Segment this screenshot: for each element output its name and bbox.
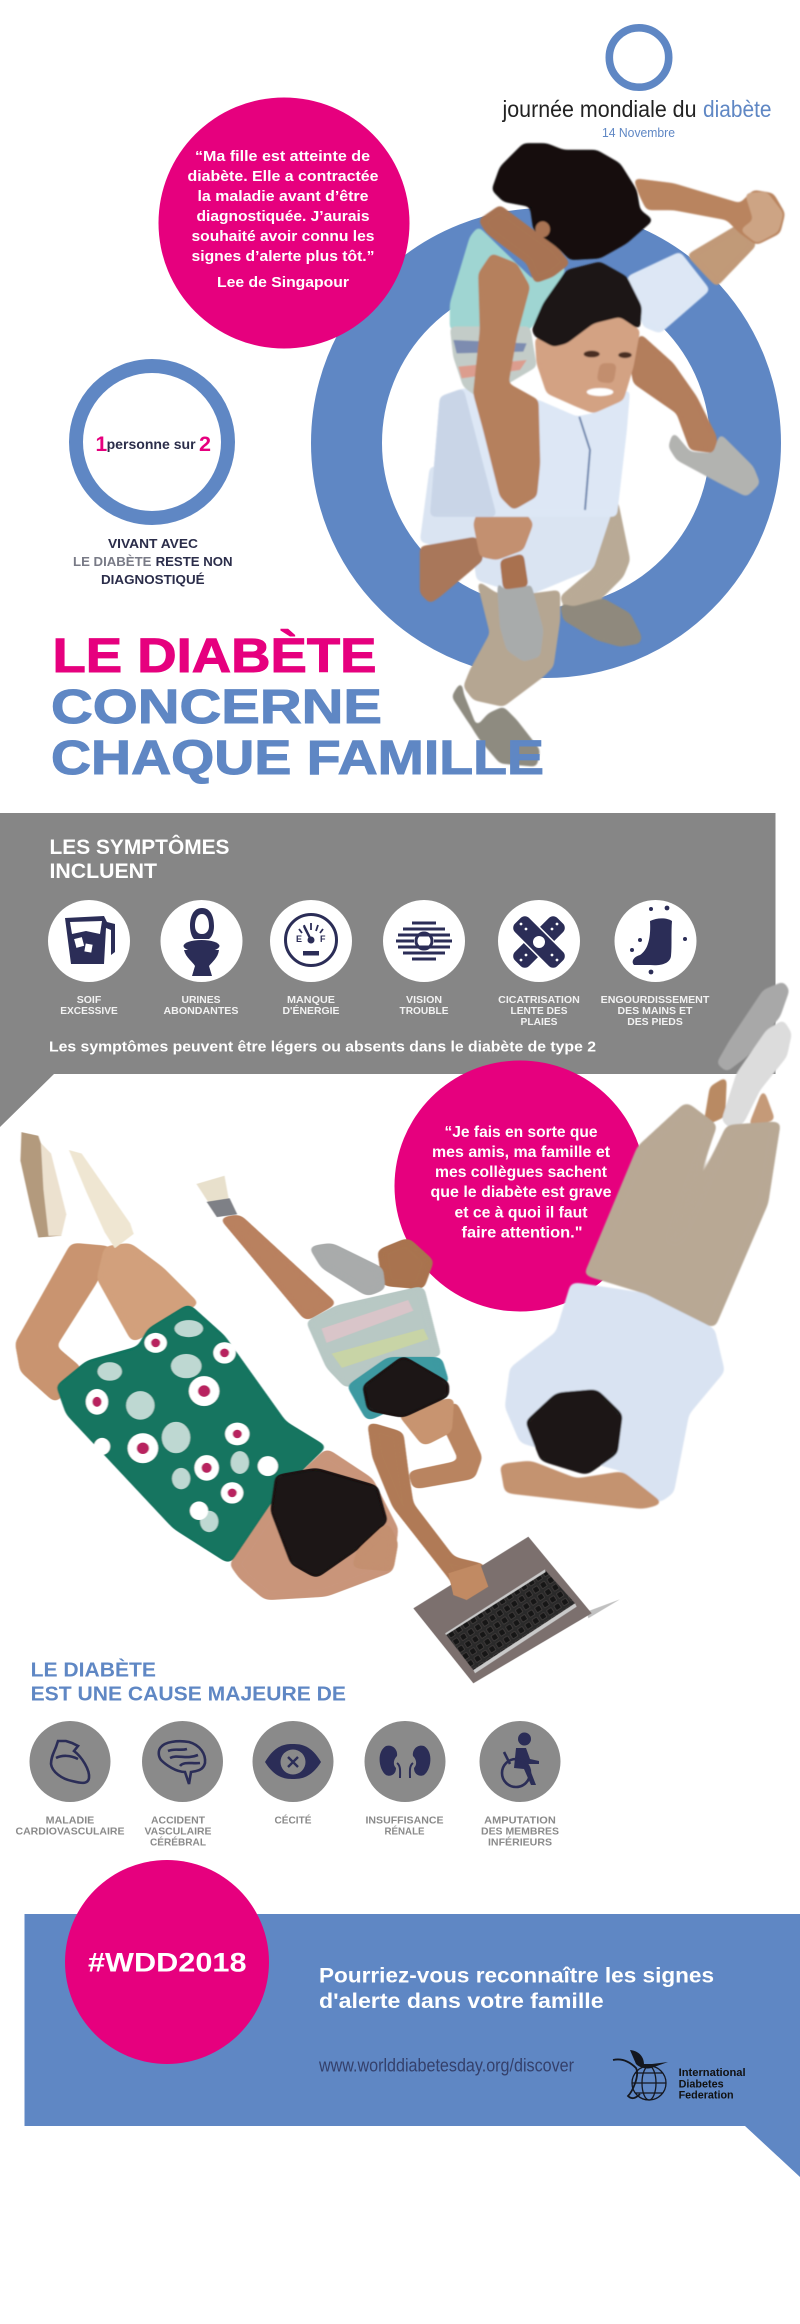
title: le diabète concerne chaque famille <box>51 629 544 785</box>
icon: blurred eye, vision trouble <box>383 900 465 982</box>
complication labels: MALADIE <box>46 1814 94 1826</box>
big blue ring <box>346 244 746 642</box>
icon: brain, accident vasculaire cérébral <box>142 1721 223 1802</box>
logo: international diabetes federation <box>613 2050 746 2102</box>
small blue ring: 1 personne sur 2 <box>76 366 228 518</box>
symptom labels: CICATRISATION <box>498 994 580 1006</box>
quote circle: je fais en sorte: mes collègues sachent <box>435 1164 607 1181</box>
photo: mother lying down <box>15 1132 398 1600</box>
icon: fuel gauge, manque d'énergie: F <box>320 934 326 944</box>
icon: jug, soif excessive <box>48 900 130 982</box>
quote circle: je fais en sorte: mes amis, ma famille et <box>432 1144 610 1161</box>
caption: vivant avec le diabète reste non diagnostiqué: VIVANT AVEC <box>108 536 199 551</box>
complication labels: AMPUTATION <box>484 1814 556 1826</box>
complication labels <box>16 1814 559 1848</box>
complication labels: CÉRÉBRAL <box>150 1836 207 1848</box>
symptom labels: SOIF <box>77 994 102 1006</box>
complication labels: VASCULAIRE <box>144 1826 212 1838</box>
icon: wheelchair, amputation des membres inférieurs <box>480 1721 560 1802</box>
symptom labels: URINES <box>182 994 220 1006</box>
icon: kidneys, insuffisance rénale <box>364 1721 446 1802</box>
symptom labels: TROUBLE <box>400 1005 448 1017</box>
quote circle: je fais en sorte: “Je fais en sorte que <box>444 1124 598 1141</box>
icon: eye with cross, cécité <box>252 1721 334 1802</box>
caption: vivant avec le diabète reste non diagnostiqué: LE DIABÈTE <box>73 554 152 569</box>
caption: vivant avec le diabète reste non diagnostiqué: DIAGNOSTIQUÉ <box>101 572 205 587</box>
call to action text <box>319 1964 714 2013</box>
complication labels: CÉCITÉ <box>274 1814 312 1826</box>
complication labels: DES MEMBRES <box>481 1826 559 1838</box>
quote circle: je fais en sorte: et ce à quoi il faut <box>454 1204 588 1222</box>
symptom labels: LENTE DES <box>510 1005 568 1017</box>
quote circle: Lee de Singapour: “Ma fille est atteinte de <box>195 148 370 165</box>
symptom labels: D'ÉNERGIE <box>282 1004 340 1017</box>
symptom labels: ENGOURDISSEMENT <box>601 994 710 1006</box>
caption: vivant avec le diabète reste non diagnostiqué <box>73 536 233 587</box>
icon: fuel gauge, manque d'énergie: E <box>296 934 302 944</box>
heading: le diabète est une cause majeure de <box>31 1658 346 1706</box>
quote circle: Lee de Singapour: diabète. Elle a contractée <box>188 168 378 185</box>
quote circle: je fais en sorte <box>394 1060 646 1312</box>
logo: journée mondiale du diabète: 14 Novembre <box>602 126 675 140</box>
call to action text: d'alerte dans votre famille <box>319 1990 604 2013</box>
logo: journée mondiale du diabète: journée mondiale du <box>502 96 696 122</box>
logo: international diabetes federation: Diabetes <box>679 2078 724 2090</box>
symptom labels: EXCESSIVE <box>60 1005 118 1017</box>
quote circle: Lee de Singapour <box>158 98 410 348</box>
complication labels: INSUFFISANCE <box>366 1814 444 1826</box>
quote circle: Lee de Singapour: Lee de Singapour <box>217 274 349 291</box>
icon: toilet, urines abondantes <box>160 900 242 982</box>
symptoms note: Les symptômes peuvent être légers ou absents dans le diabète de type 2 <box>49 1038 596 1056</box>
caption: vivant avec le diabète reste non diagnostiqué: RESTE NON <box>156 554 233 569</box>
logo: journée mondiale du diabète: diabète <box>703 96 772 122</box>
photo: father carrying daughter on shoulders <box>420 143 785 767</box>
icon: crossed bandages, cicatrisation lente <box>498 900 580 982</box>
symptom labels: DES PIEDS <box>627 1016 683 1028</box>
complication labels: INFÉRIEURS <box>488 1836 552 1848</box>
icon: foot with dots, engourdissement <box>614 900 696 982</box>
symptom labels: DES MAINS ET <box>618 1005 693 1017</box>
symptoms heading: INCLUENT <box>50 859 157 883</box>
quote circle: Lee de Singapour: souhaité avoir connu les <box>192 228 374 245</box>
small blue ring: 1 personne sur 2: 2 <box>199 433 211 456</box>
complication labels: RÉNALE <box>384 1824 424 1838</box>
quote circle: Lee de Singapour: la maladie avant d’être <box>198 188 368 205</box>
symptom labels <box>60 994 710 1028</box>
symptom labels: ABONDANTES <box>164 1005 238 1017</box>
title: le diabète concerne chaque famille: CONCERNE <box>51 681 382 734</box>
symptom labels: PLAIES <box>520 1016 558 1028</box>
icon: heart, maladie cardiovasculaire <box>30 1721 110 1802</box>
title: le diabète concerne chaque famille: LE DIABÈTE <box>52 629 376 683</box>
call to action text: Pourriez-vous reconnaître les signes <box>319 1964 714 1988</box>
photo: father lying down <box>500 982 792 1509</box>
heading: le diabète est une cause majeure de: LE DIABÈTE <box>31 1658 156 1682</box>
complication labels: ACCIDENT <box>151 1814 206 1826</box>
logo: journée mondiale du diabète <box>502 28 772 140</box>
small blue ring: 1 personne sur 2: 1 <box>96 433 108 456</box>
photo: daughter lying down <box>196 1176 490 1604</box>
panel: les symptômes incluent <box>0 813 776 1127</box>
icon: fuel gauge, manque d'énergie <box>270 900 352 982</box>
complication labels: CARDIOVASCULAIRE <box>16 1826 124 1838</box>
laptop <box>413 1537 620 1683</box>
quote circle: je fais en sorte: que le diabète est grave <box>430 1184 612 1201</box>
quote circle: Lee de Singapour: diagnostiquée. J’aurais <box>196 208 370 225</box>
symptoms heading: LES SYMPTÔMES <box>50 834 230 859</box>
symptom labels: VISION <box>406 994 442 1006</box>
symptoms heading <box>50 834 230 883</box>
quote circle: Lee de Singapour: signes d’alerte plus tôt.” <box>192 248 374 265</box>
panel: call to action banner <box>24 1860 800 2177</box>
title: le diabète concerne chaque famille: CHAQUE FAMILLE <box>51 732 544 785</box>
hashtag circle <box>65 1860 269 2064</box>
heading: le diabète est une cause majeure de: EST UNE CAUSE MAJEURE DE <box>31 1682 346 1706</box>
small blue ring: 1 personne sur 2: personne sur <box>107 436 196 452</box>
quote circle: je fais en sorte: faire attention." <box>462 1224 582 1242</box>
website link: www.worlddiabetesday.org/discover <box>318 2056 574 2076</box>
symptom labels: MANQUE <box>287 994 335 1006</box>
logo: international diabetes federation: International <box>679 2067 746 2079</box>
logo: international diabetes federation: Federation <box>679 2090 734 2102</box>
hashtag circle: #WDD2018 <box>88 1948 246 1978</box>
